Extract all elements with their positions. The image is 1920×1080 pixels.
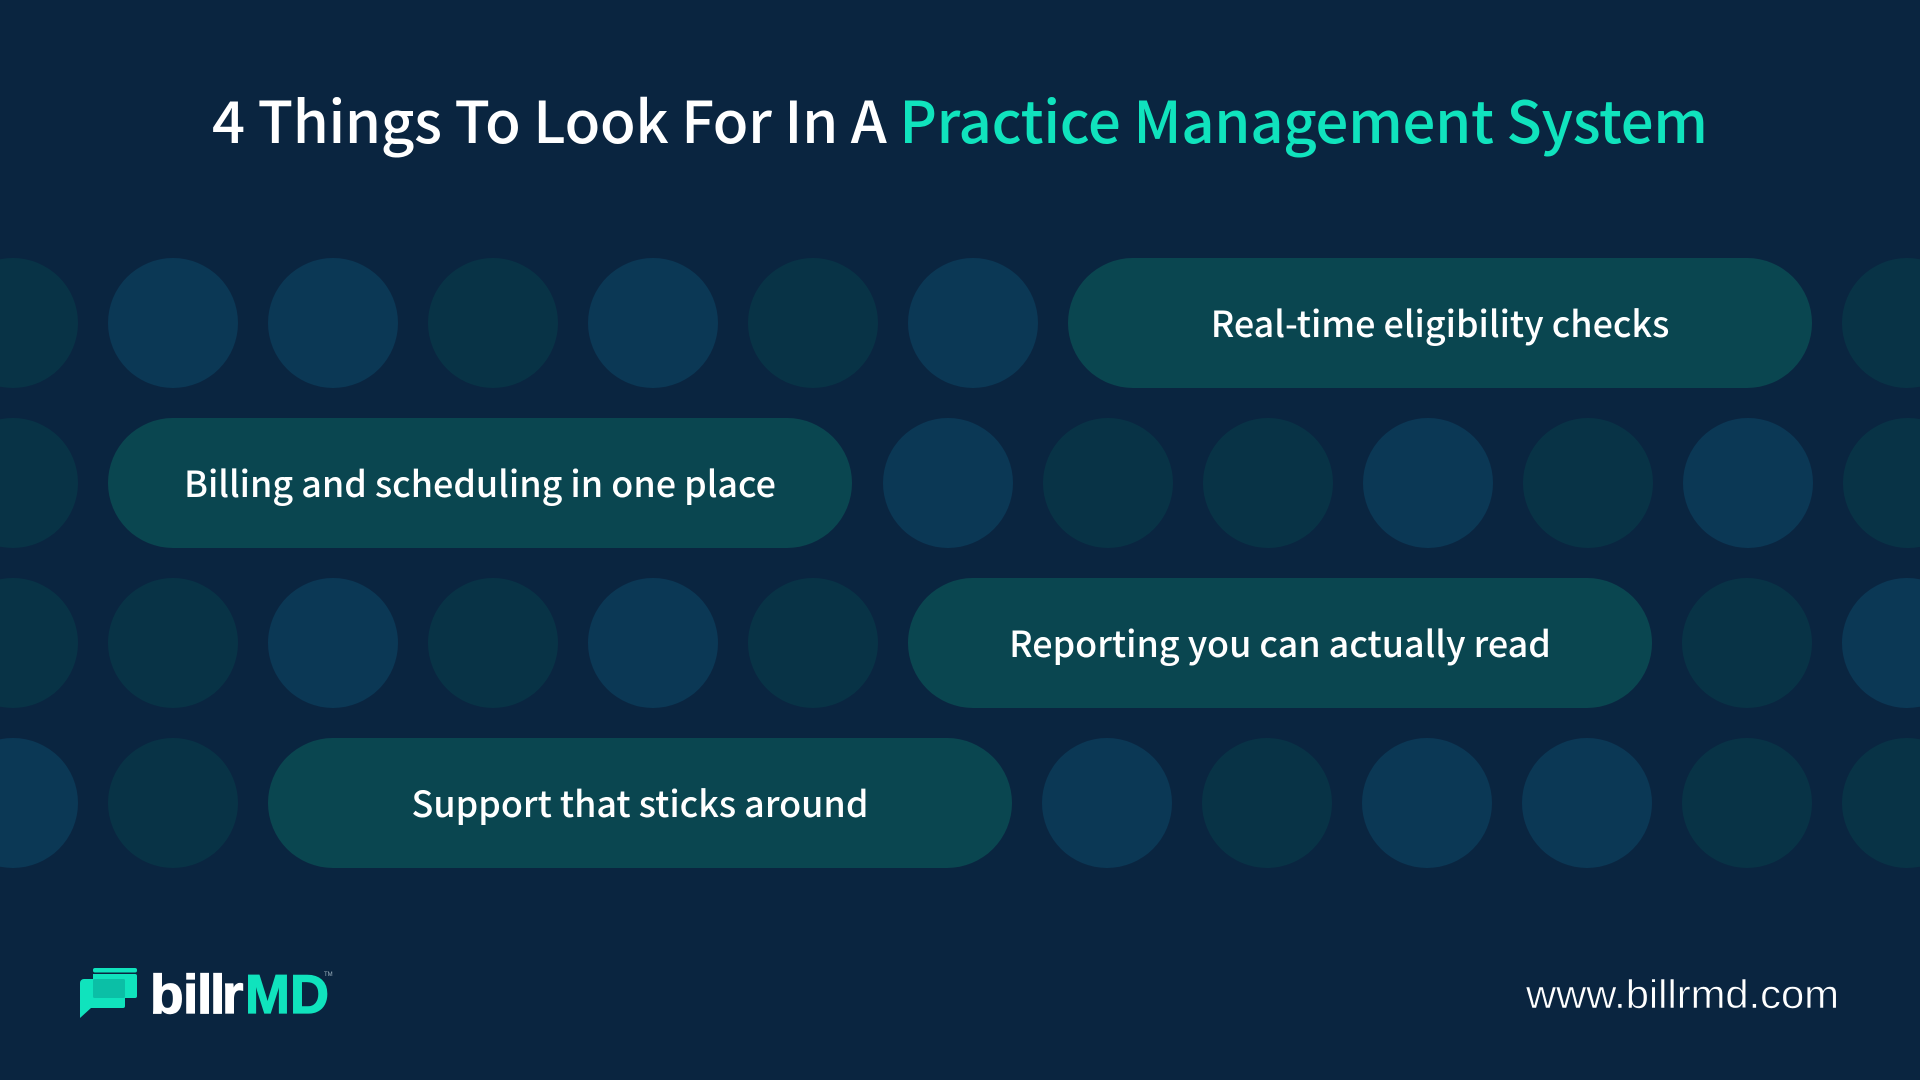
logo: billrMD: TM bbox=[324, 972, 333, 978]
row 4: circles and pill bbox=[0, 738, 1920, 868]
title: 4 Things To Look For In A Practice Management System bbox=[212, 76, 1708, 160]
pill: support: Support that sticks around bbox=[412, 776, 868, 828]
row 1: circles and pill bbox=[0, 258, 1920, 388]
pill: billing and scheduling: Billing and scheduling in one place bbox=[184, 456, 776, 508]
icon: chat bubbles bbox=[80, 968, 137, 1018]
logo: billrMD: MD bbox=[245, 963, 329, 1025]
pill: real-time eligibility checks: Real-time eligibility checks bbox=[1211, 296, 1669, 348]
row 2: circles and pill bbox=[0, 418, 1920, 548]
logo: billrMD bbox=[80, 963, 333, 1025]
pill: reporting: Reporting you can actually read bbox=[1009, 616, 1551, 668]
pill: reporting bbox=[908, 578, 1652, 708]
row 3: circles and pill bbox=[0, 578, 1920, 708]
pill: billing and scheduling bbox=[108, 418, 852, 548]
pill: support bbox=[268, 738, 1012, 868]
website url: www.billrmd.com bbox=[1525, 973, 1839, 1017]
pill: real-time eligibility checks bbox=[1068, 258, 1812, 388]
wordmark: billr bbox=[150, 963, 243, 1025]
